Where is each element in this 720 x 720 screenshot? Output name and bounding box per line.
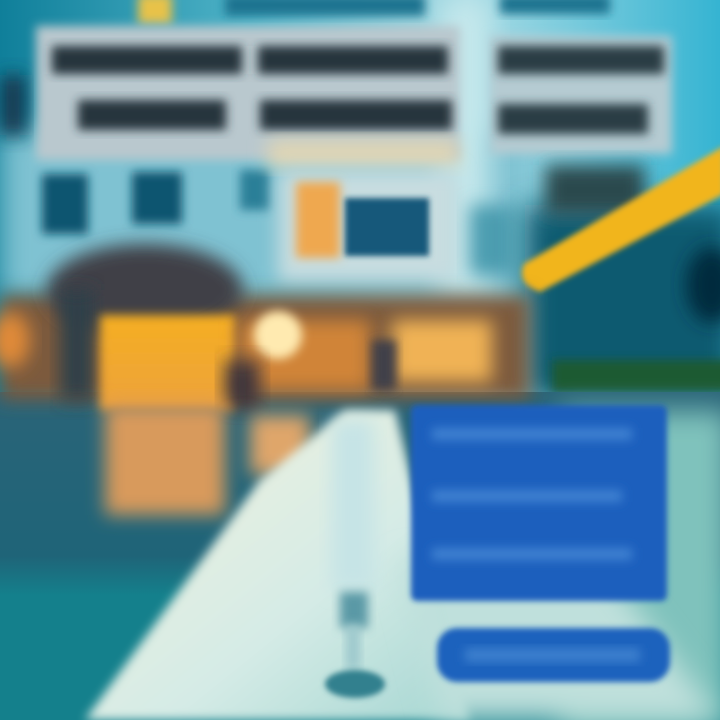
reflection on wet ground (105, 405, 310, 515)
button: blue call to action (437, 628, 670, 682)
heading text line 1 (illegible, blurred) (52, 46, 448, 74)
building windows (42, 140, 514, 282)
background: sky and building facade (0, 0, 720, 420)
figure on walkway (325, 420, 385, 698)
heading text right (illegible, blurred) (498, 46, 664, 134)
right dark foliage (525, 165, 720, 400)
panel: heading sign right (490, 36, 672, 154)
info box text (illegible, blurred) (432, 428, 632, 560)
panel: heading sign left (36, 26, 460, 160)
panel: blue info box (411, 405, 667, 601)
ground (0, 392, 720, 720)
button label (illegible, blurred) (465, 648, 640, 662)
right lawn (560, 410, 720, 720)
entrance with arch and glow (0, 244, 530, 410)
heading text line 2 (illegible, blurred) (78, 100, 452, 130)
walkway (85, 410, 470, 720)
icon: yellow diagonal streak (522, 146, 720, 292)
